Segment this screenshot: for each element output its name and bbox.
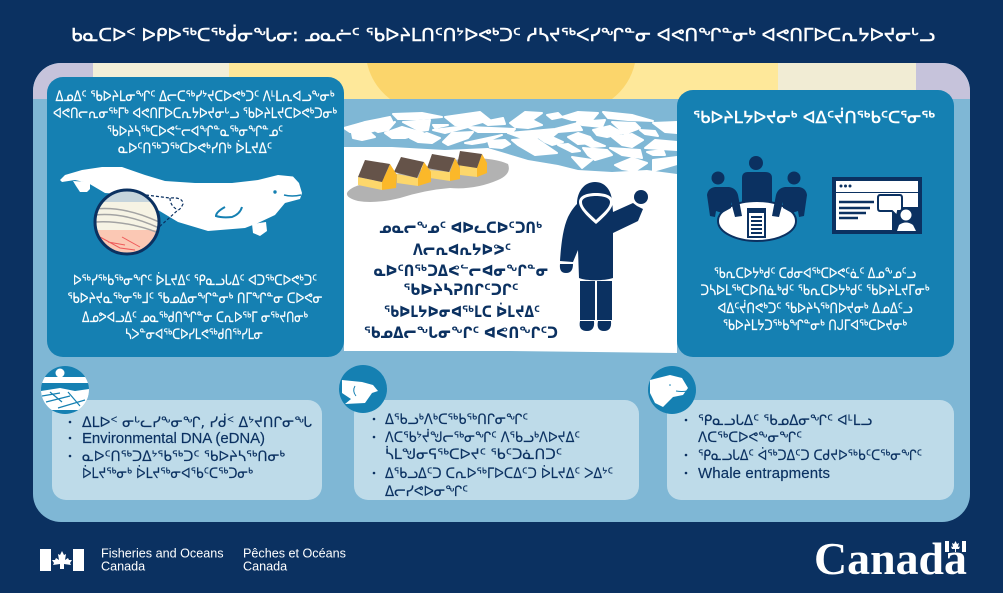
magnified blubber cross-section (95, 190, 159, 254)
panel lower text: ᐃᓄᕗᐊᓗᐃᑦ ᓄᓇᖅᑯᑎᖏᓐᓂ ᑕᕆᐅᖅᒥ ᓂᖅᔪᑎᓂᒃ (82, 310, 308, 326)
panel heading: ᖃᐅᔨᒪᔭᐅᔪᓂᒃ ᐊᐃᑦᔫᑎᖅᑲᑦᑕᕐᓂᖅ (693, 107, 935, 128)
Canada wordmark: Canada (814, 534, 967, 584)
community monitoring text: ᓇᐅᑦᑎᖅᑐᐃᕙᓪᓕᐊᓂᖏᓐᓂ (374, 262, 548, 280)
panel lower text: ᓴᐳᓐᓂᐊᖅᑕᐅᓯᒪᕙᖅᑯᑎᖅᓯᒪᓂ (125, 327, 263, 343)
panel: Inuit knowledge and beluga (47, 77, 344, 357)
panel: fish list: ᐃᓕᓯᕙᐅᓂᖏᑦ (385, 484, 468, 500)
panel intro text: ᐊᕙᑎᓕᕆᓂᖅᒥᒃ ᐊᕙᑎᒥᐅᑕᕆᔭᐅᔪᓂᒡᓗ ᖃᐅᔨᒪᔪᑕᐅᕙᒃᑐᓂᒃ (53, 106, 337, 122)
community monitoring text: ᖃᓄᐃᓕᖓᓂᖏᑦ ᐊᕙᑎᖏᑦᑐ (364, 324, 558, 342)
panel body text: ᑐᓴᐅᒪᖅᑕᐅᑎᓈᒃᑯᑦ ᖃᕆᑕᐅᔭᒃᑯᑦ ᖃᐅᔨᒪᔪᒥᓂᒃ (700, 283, 930, 299)
panel body text: ᐊᐃᑦᔫᑎᕙᒃᑐᑦ ᖃᐅᔨᓴᖅᑎᐅᔪᓂᒃ ᐃᓄᐃᑦᓗ (718, 299, 912, 317)
French name: Canada (243, 560, 287, 574)
English name: Canada (101, 560, 145, 574)
village on shore (347, 151, 509, 202)
flag symbol (40, 549, 84, 571)
panel lower text: ᐅᖅᓯᖅᑲᖅᓂᖏᑦ ᐆᒪᔪᐃᑦ ᕿᓇᓗᒐᐃᑦ ᐊᑐᖅᑕᐅᕙᒃᑐᑦ (73, 270, 317, 289)
house 3 (427, 154, 460, 181)
panel intro text (53, 89, 337, 157)
community monitoring text: ᖃᐅᔨᓴᕈᑎᒋᑦᑐᒋᑦ (404, 281, 518, 299)
person in parka waving (560, 182, 648, 331)
community monitoring text (364, 219, 558, 342)
house 1 (358, 160, 397, 190)
panel intro text: ᓇᐅᑦᑎᖅᑐᖅᑕᐅᕙᒃᓯᑎᒃ ᐆᒪᔪᐃᑦ (118, 138, 272, 157)
icon: sea ice circle (41, 366, 90, 414)
panel intro text: ᖃᐅᔨᓴᖅᑕᐅᕙᓪᓕᐊᖏᓐᓇᖅᓂᖏᓐᓄᑦ (107, 124, 283, 140)
panel lower text (68, 270, 322, 343)
panel: whale list (667, 400, 954, 500)
English name: Fisheries and Oceans (101, 546, 224, 560)
panel: environment list: Environmental DNA (eDNA) (82, 430, 265, 447)
icon: web page with chat (832, 177, 922, 234)
house 2 (394, 157, 431, 186)
panel: whale list: ᕿᓇᓗᒐᐃᑦ ᖃᓄᐃᓂᖏᑦ ᐊᒻᒪᓗ (698, 413, 872, 429)
panel: fish list (354, 400, 639, 500)
panel: whale list: Whale entrapments (698, 465, 830, 482)
icon: fish head (339, 365, 387, 413)
panel lower text: ᖃᐅᔨᔪᓇᖅᓂᖅᒧᑦ ᖃᓄᐃᓂᖏᓐᓂᒃ ᑎᒥᖏᓐᓂ ᑕᐅᕙᓂ (68, 291, 322, 307)
panel: environment list (52, 400, 322, 500)
panel: environment list: ᐆᒪᔪᖅᓂᒃ ᐆᒪᔪᖅᓂᐊᖃᑦᑕᖅᑐᓂᒃ (82, 463, 253, 482)
shadow (347, 158, 509, 202)
panel: environment list: ᐃᒪᐅᑉ ᓂᒡᓚᓯᖕᓂᖏ, ᓯᑰᑉ ᐃᔾᔪᑎᒋᓂᖓ (82, 412, 312, 431)
community monitoring text: ᓄᓇᓕᖕᓄᑦ ᐊᐅᓚᑕᐅᑦᑐᑎᒃ (380, 219, 542, 237)
community monitoring text: ᐱᓕᕆᐊᕆᔭᐅᕗᑦ (413, 241, 511, 259)
footer: Government of Canada signature (40, 546, 346, 574)
panel: whale list: ᐱᑕᖅᑕᐅᕙᖕᓂᖏᑦ (698, 430, 802, 446)
panel body text (700, 266, 930, 334)
panel: environment list: ᓇᐅᑦᑎᖅᑐᐃᔾᖃᖅᑐᑦ ᖃᐅᔨᓴᖅᑎᓂᒃ (82, 449, 285, 465)
panel: fish list: ᓵᒪᖑᓂᕋᖅᑕᐅᔪᑦ ᖃᑦᑐᓈᑎᑐᑦ (385, 445, 562, 463)
icon: beluga head (648, 366, 696, 414)
ice field (344, 112, 677, 353)
title: ᑲᓇᑕᐅᑉ ᐅᑭᐅᖅᑕᖅᑰᓂᖓᓂ: ᓄᓇᓖᑦ ᖃᐅᔨᒪᑎᑦᑎᔾᐅᕙᒃᑐᑦ ᓱᓴᔪᖅᐸᓯᖏᓐᓂ ᐊᕙᑎᖏᓐᓂᒃ ᐊᕙᑎᒥᐅᑕᕆᔭᐅᔪᓂᒡᓗ (71, 24, 935, 46)
beluga whale (60, 167, 302, 236)
panel: fish list: ᐃᖃᓗᐃᑦᑐ ᑕᕆᐅᖅᒥᐅᑕᐃᑦᑐ ᐆᒪᔪᐃᑦ ᐳᐃᔾᑦ (385, 463, 613, 482)
icon: community meeting (707, 156, 807, 241)
French name: Pêches et Océans (243, 546, 346, 560)
main scene panel (33, 63, 970, 522)
panel: knowledge sharing (677, 90, 954, 357)
house 4 (457, 151, 487, 177)
panel body text: ᖃᕆᑕᐅᔭᒃᑯᑦ ᑕᑯᓂᐊᖅᑕᐅᕙᑦᓈᑦ ᐃᓄᖕᓄᑦᓗ (714, 266, 916, 282)
panel: whale list: ᕿᓇᓗᒐᐃᑦ ᐋᖅᑐᐃᑦᑐ ᑕᑯᔪᐅᖅᑲᑦᑕᖅᓂᖏᑦ (698, 445, 922, 464)
sky bands and sun (33, 63, 970, 99)
panel: fish list: ᐱᑕᖃᔾᔫᖑᓕᖅᓂᖏᑦ ᐱᖃᓗᒃᐱᐅᔪᐃᑦ (385, 428, 580, 446)
panel body text: ᖃᐅᔨᒪᔭᑐᖅᑲᖏᓐᓂᒃ ᑎᒍᒥᐊᖅᑕᐅᔪᓂᒃ (723, 318, 907, 334)
community monitoring text: ᖃᐅᒪᔭᐅᓂᐊᖅᒪᑕ ᐆᒪᔪᐃᑦ (384, 302, 540, 321)
panel: fish list: ᐃᖃᓗᒃᐱᒃᑕᖅᑲᖅᑎᒋᓂᖏᑦ (385, 412, 528, 428)
panel intro text: ᐃᓄᐃᑦ ᖃᐅᔨᒪᓂᖏᑦ ᐃᓕᑕᖅᓯᔾᔪᑕᐅᕙᒃᑐᑦ ᐱᒻᒪᕆᐊᓗᖕᓂᒃ (56, 89, 335, 105)
